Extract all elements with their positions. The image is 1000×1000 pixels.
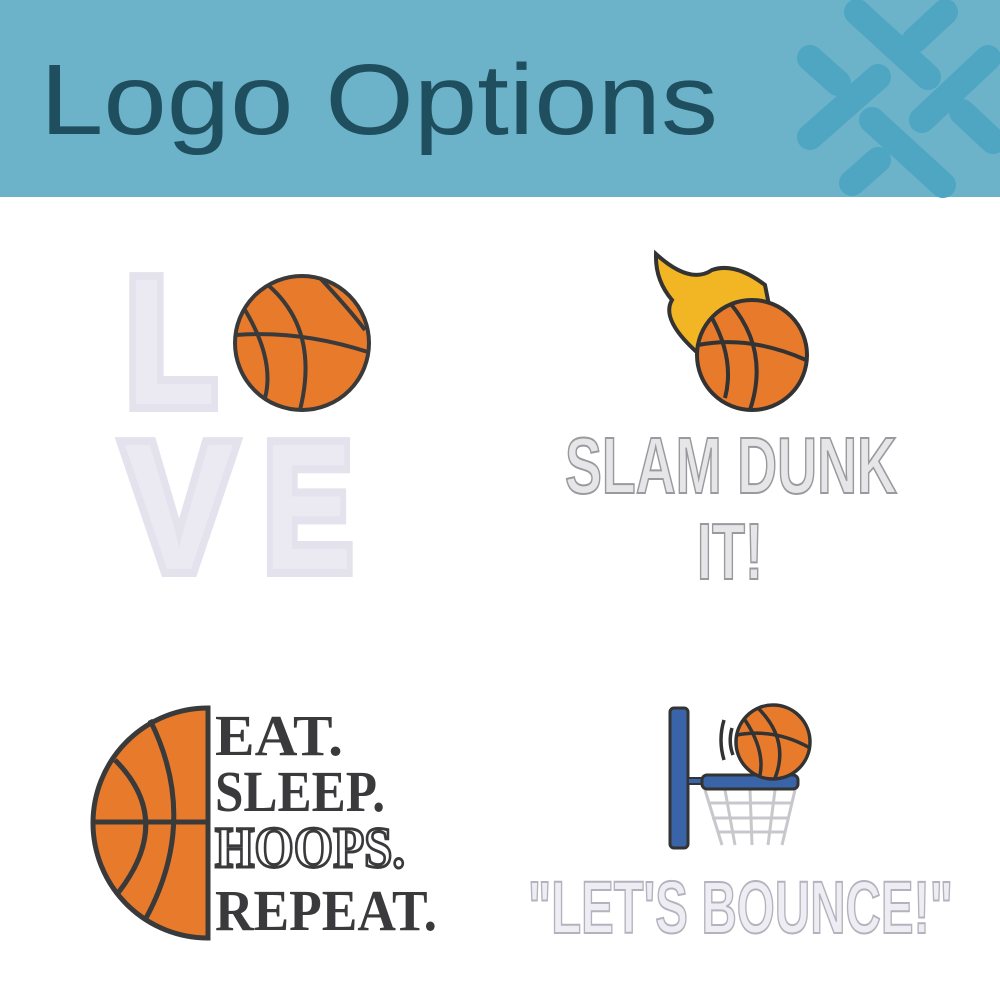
title: Logo Options: [40, 44, 718, 156]
logo: LOVE basketball: L: [126, 242, 216, 443]
text: slogan: EAT.: [215, 703, 343, 768]
icon: hoop and ball: [670, 705, 810, 848]
logo: LOVE basketball: E: [264, 407, 352, 608]
text: slogan: [215, 703, 437, 943]
text: slogan: REPEAT.: [215, 878, 437, 943]
logo: slam dunk it: [565, 254, 897, 596]
text: slogan: HOOPS.: [215, 815, 405, 880]
logo: eat sleep hoops repeat: [93, 703, 437, 943]
text: slam dunk: IT!: [697, 507, 763, 596]
text: slogan: SLEEP.: [215, 759, 385, 824]
logo: LOVE basketball: V: [124, 407, 234, 608]
icon: basketball: [235, 276, 369, 410]
logo: let's bounce: [528, 705, 953, 949]
icon: woven X logo: [810, 12, 993, 185]
header banner: [0, 0, 1000, 197]
icon: flaming basketball: [656, 254, 807, 410]
icon: half basketball: [93, 708, 208, 938]
logo: LOVE basketball: [124, 242, 369, 608]
text: slam dunk: [565, 421, 897, 596]
